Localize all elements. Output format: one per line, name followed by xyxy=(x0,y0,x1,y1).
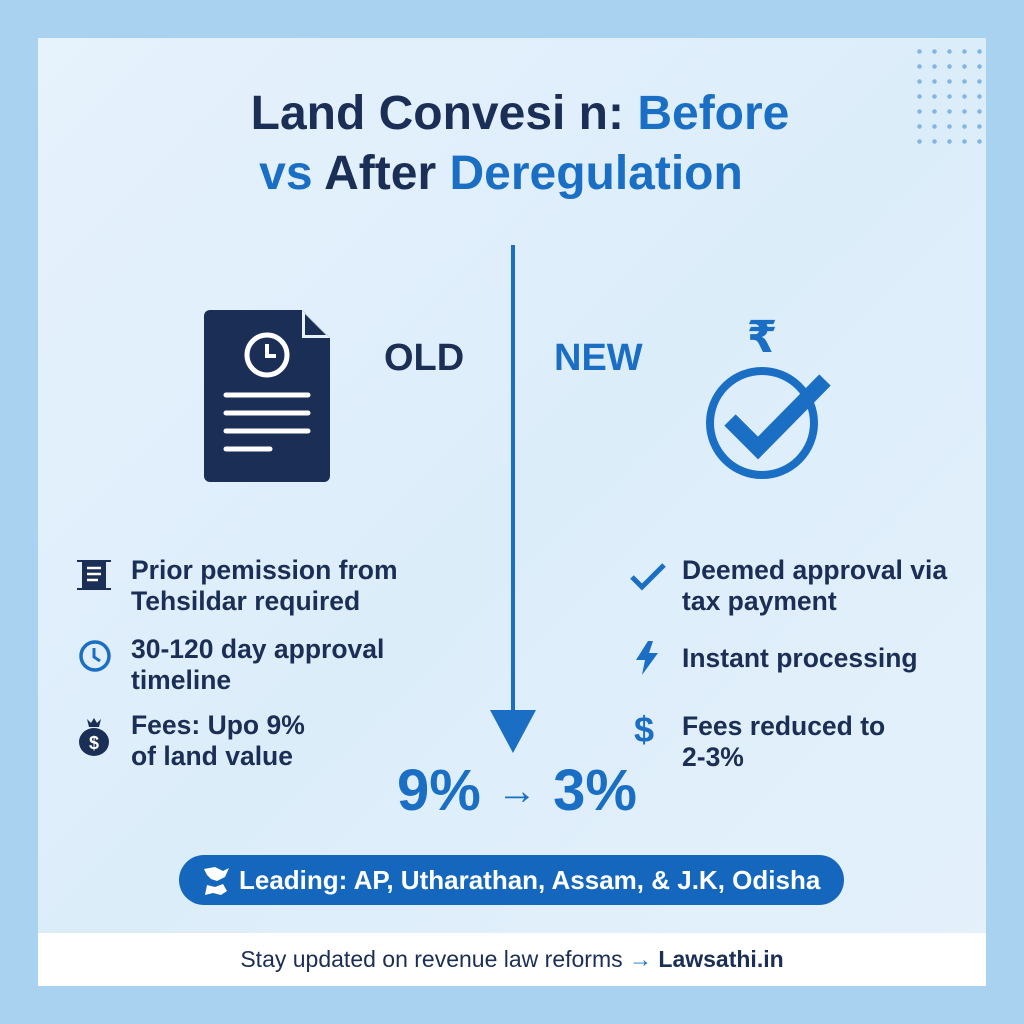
icon: map xyxy=(204,867,229,895)
icon: clock xyxy=(79,640,111,672)
text: fees xyxy=(131,710,305,771)
label: NEW: NEW xyxy=(554,337,643,379)
old list xyxy=(77,555,398,771)
title: vs After Deregulation xyxy=(259,147,743,200)
footer xyxy=(38,933,986,986)
icon: lightning xyxy=(636,641,658,675)
text: deemed approval: tax payment xyxy=(682,586,837,616)
title xyxy=(251,87,789,200)
icon: document xyxy=(204,310,330,482)
icon: scroll xyxy=(77,560,111,590)
text: fees reduced: Fees reduced to xyxy=(682,711,885,741)
text: prior permission xyxy=(131,555,398,616)
text: fees: of land value xyxy=(131,741,293,771)
text: fees reduced xyxy=(682,711,885,772)
icon: check xyxy=(630,563,666,590)
icon: money bag: $ xyxy=(89,733,99,753)
label: OLD: OLD xyxy=(384,337,464,379)
text: prior permission: Tehsildar required xyxy=(131,586,360,616)
icon: dollar: $ xyxy=(634,709,654,750)
banner: leading states xyxy=(179,855,844,905)
title: Land Convesi n: Before xyxy=(251,87,789,140)
text: fees: Fees: Upo 9% xyxy=(131,710,305,740)
text: instant: Instant processing xyxy=(682,643,918,673)
arrow: vertical divider xyxy=(490,245,536,753)
decorative dots xyxy=(912,44,988,152)
text: timeline xyxy=(131,634,384,695)
banner: leading states: Leading: AP, Utharathan, Assam, & J.K, Odisha xyxy=(239,865,820,895)
text: timeline: timeline xyxy=(131,665,231,695)
icon: money bag xyxy=(79,718,109,756)
footer: Stay updated on revenue law reforms → Lawsathi.in xyxy=(240,946,784,972)
icon: rupee check xyxy=(706,312,831,479)
text: prior permission: Prior pemission from xyxy=(131,555,398,585)
new list xyxy=(630,555,948,772)
icon: rupee check: ₹ xyxy=(747,312,777,363)
text: deemed approval xyxy=(682,555,948,616)
text: fees reduced: 2-3% xyxy=(682,742,744,772)
stat: 9% to 3%: 9% → 3% xyxy=(397,758,637,823)
text: timeline: 30-120 day approval xyxy=(131,634,384,664)
text: deemed approval: Deemed approval via xyxy=(682,555,947,585)
